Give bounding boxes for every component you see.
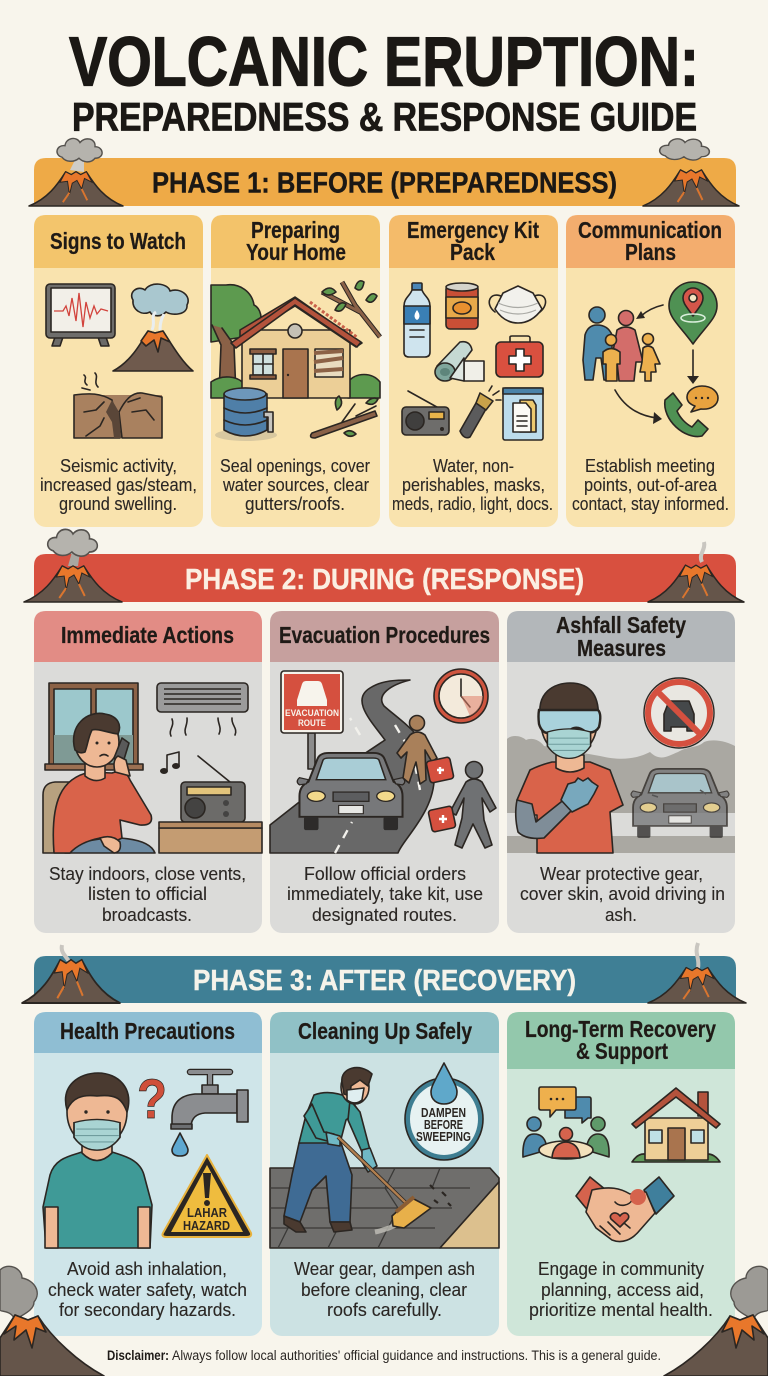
icon: location pin xyxy=(669,282,717,344)
text: health precautions xyxy=(48,1259,247,1320)
text: communication plans: points, out-of-area xyxy=(584,475,718,495)
icon: closed vent xyxy=(157,683,248,736)
icon: gray car xyxy=(297,753,405,830)
text: emergency kit pack: Water, non- xyxy=(433,456,514,476)
text: signs to watch xyxy=(40,456,197,514)
icon: window xyxy=(45,683,143,770)
disclaimer: Disclaimer: xyxy=(107,1348,169,1363)
text: communication plans: contact, stay informed. xyxy=(572,494,729,514)
icon: evacuation route sign xyxy=(281,671,343,769)
icon: lahar hazard sign: HAZARD xyxy=(183,1219,230,1233)
icon: music notes xyxy=(160,752,180,774)
banner: phase 3 xyxy=(22,943,746,1003)
text: ashfall safety measures xyxy=(520,864,725,925)
icon: radio on desk xyxy=(159,756,262,853)
heading: immediate actions: Immediate Actions xyxy=(61,622,234,648)
panel: long-term recovery and support xyxy=(507,1012,735,1336)
text: long-term recovery and support: Engage in community xyxy=(538,1259,704,1279)
icon: ash covered car xyxy=(631,769,729,838)
text: preparing your home: gutters/roofs. xyxy=(245,494,345,514)
illustration: person sweeping xyxy=(284,1068,431,1232)
icon: no driving sign xyxy=(644,678,714,748)
text: emergency kit pack xyxy=(392,456,553,514)
text: communication plans: Establish meeting xyxy=(585,456,715,476)
icon: lahar hazard sign xyxy=(162,1155,251,1237)
heading: long-term recovery and support: & Support xyxy=(576,1038,668,1064)
text: preparing your home: water sources, clear xyxy=(222,475,369,495)
icon: food can xyxy=(446,283,478,329)
icon: evacuation route sign: EVACUATION xyxy=(285,708,339,718)
icon: seismograph monitor xyxy=(46,284,115,346)
banner: phase 2 xyxy=(24,529,744,602)
heading: preparing your home: Preparing xyxy=(251,217,340,243)
icon: cracked ground xyxy=(74,373,162,438)
text: signs to watch: ground swelling. xyxy=(59,494,177,514)
panel: cleaning up safely xyxy=(270,1012,499,1336)
illustration: ash clouds xyxy=(507,736,735,853)
text: communication plans xyxy=(572,456,729,514)
icon: bandage rolls xyxy=(435,342,484,381)
text: cleaning up safely xyxy=(294,1259,475,1320)
icon: bottom left volcano xyxy=(0,1266,104,1376)
heading: ashfall safety measures: Ashfall Safety xyxy=(556,612,686,638)
text: ashfall safety measures: Wear protective gear, xyxy=(540,864,703,884)
text: cleaning up safely: Wear gear, dampen ash xyxy=(294,1259,475,1279)
illustration: person on phone xyxy=(43,713,155,853)
icon: water faucet xyxy=(171,1072,248,1129)
icon: dampen before sweeping badge xyxy=(405,1063,483,1160)
heading: health precautions: Health Precautions xyxy=(60,1018,235,1044)
icon: dampen before sweeping badge: BEFORE xyxy=(424,1117,463,1132)
icon: community meeting xyxy=(523,1087,609,1159)
heading: cleaning up safely: Cleaning Up Safely xyxy=(298,1018,472,1044)
heading: preparing your home: Your Home xyxy=(246,239,346,265)
icon: family xyxy=(583,307,660,381)
text: evacuation procedures: Follow official orders xyxy=(304,864,466,884)
icon: handshake with heart xyxy=(576,1177,674,1242)
icon: evacuation route sign: ROUTE xyxy=(298,718,326,728)
panel: preparing your home xyxy=(211,215,380,527)
panel: communication plans xyxy=(566,215,735,527)
text: preparing your home xyxy=(220,456,370,514)
heading: communication plans: Plans xyxy=(625,239,676,265)
icon: radio xyxy=(402,391,449,435)
icon: first aid kit xyxy=(496,336,543,377)
text: long-term recovery and support: prioritize mental health. xyxy=(529,1300,713,1320)
arrows: communication flow xyxy=(615,305,699,424)
heading: emergency kit pack xyxy=(407,217,539,265)
icon: water bottle xyxy=(404,283,430,357)
text: immediate actions: listen to official xyxy=(88,884,207,904)
panel: ashfall safety measures xyxy=(507,611,735,933)
icon: walking person with case xyxy=(397,716,454,784)
text: health precautions: check water safety, watch xyxy=(48,1280,247,1300)
icon: water drop xyxy=(172,1133,188,1156)
text: cleaning up safely: roofs carefully. xyxy=(327,1300,442,1320)
heading: preparing your home xyxy=(246,217,346,265)
icon: clock xyxy=(434,669,488,723)
icon: documents pouch xyxy=(503,388,543,440)
icon: steaming volcano xyxy=(113,284,193,371)
text: signs to watch: increased gas/steam, xyxy=(40,475,197,495)
panel: emergency kit pack xyxy=(389,215,558,527)
illustration: evacuation road xyxy=(270,680,434,853)
icon: dampen before sweeping badge: DAMPEN xyxy=(421,1105,466,1120)
heading: emergency kit pack: Emergency Kit xyxy=(407,217,539,243)
heading: emergency kit pack: Pack xyxy=(450,239,495,265)
heading: communication plans: Communication xyxy=(578,217,722,243)
text: health precautions: Avoid ash inhalation, xyxy=(67,1259,227,1279)
text: ashfall safety measures: cover skin, avoid driving in xyxy=(520,884,725,904)
text: emergency kit pack: perishables, masks, xyxy=(402,475,545,495)
panel: health precautions xyxy=(34,1012,262,1336)
heading: long-term recovery and support: Long-Term Recovery xyxy=(525,1016,716,1042)
title xyxy=(69,22,699,140)
icon: walking person in gray xyxy=(428,762,496,848)
heading: communication plans xyxy=(578,217,722,265)
illustration: masked person xyxy=(43,1073,152,1248)
text: ashfall safety measures: ash. xyxy=(605,905,637,925)
banner: phase 1 xyxy=(29,138,739,206)
icon: phone and chat bubble xyxy=(665,386,718,437)
text: immediate actions: Stay indoors, close vents, xyxy=(49,864,246,884)
icon: dampen before sweeping badge: SWEEPING xyxy=(416,1129,471,1144)
text: cleaning up safely: before cleaning, clear xyxy=(301,1280,467,1300)
icon: question mark: ? xyxy=(137,1067,167,1130)
icon: face mask xyxy=(489,286,546,323)
heading: ashfall safety measures: Measures xyxy=(577,635,666,661)
disclaimer: Always follow local authorities' official guidance and instructions. This is a general guide. xyxy=(172,1348,661,1363)
text: long-term recovery and support: planning, access aid, xyxy=(541,1280,704,1300)
heading: evacuation procedures: Evacuation Procedures xyxy=(279,622,490,648)
illustration: house prepared xyxy=(211,281,380,441)
text: signs to watch: Seismic activity, xyxy=(60,456,177,476)
text: evacuation procedures: immediately, take kit, use xyxy=(287,884,483,904)
banner: phase 2: PHASE 2: DURING (RESPONSE) xyxy=(185,564,584,596)
text: long-term recovery and support xyxy=(529,1259,713,1320)
icon: lahar hazard sign: LAHAR xyxy=(187,1206,227,1220)
banner: phase 1: PHASE 1: BEFORE (PREPAREDNESS) xyxy=(152,168,617,200)
banner: phase 3: PHASE 3: AFTER (RECOVERY) xyxy=(193,965,576,997)
text: emergency kit pack: meds, radio, light, docs. xyxy=(392,494,553,514)
heading: long-term recovery and support xyxy=(525,1016,716,1064)
illustration: roof xyxy=(270,1168,499,1248)
icon: person in protective gear xyxy=(516,683,623,853)
panel: evacuation procedures xyxy=(270,611,499,933)
icon: house xyxy=(632,1088,720,1162)
text: evacuation procedures: designated routes. xyxy=(312,905,457,925)
icon: bottom right volcano xyxy=(664,1266,768,1376)
panel: signs to watch xyxy=(34,215,203,527)
text: immediate actions xyxy=(49,864,246,925)
icon: flashlight xyxy=(460,386,501,438)
text: evacuation procedures xyxy=(287,864,483,925)
text: immediate actions: broadcasts. xyxy=(102,905,192,925)
text: preparing your home: Seal openings, cover xyxy=(220,456,370,476)
text: health precautions: for secondary hazards. xyxy=(59,1300,236,1320)
panel: immediate actions xyxy=(34,611,262,933)
heading: ashfall safety measures xyxy=(556,612,686,661)
heading: signs to watch: Signs to Watch xyxy=(50,228,186,254)
